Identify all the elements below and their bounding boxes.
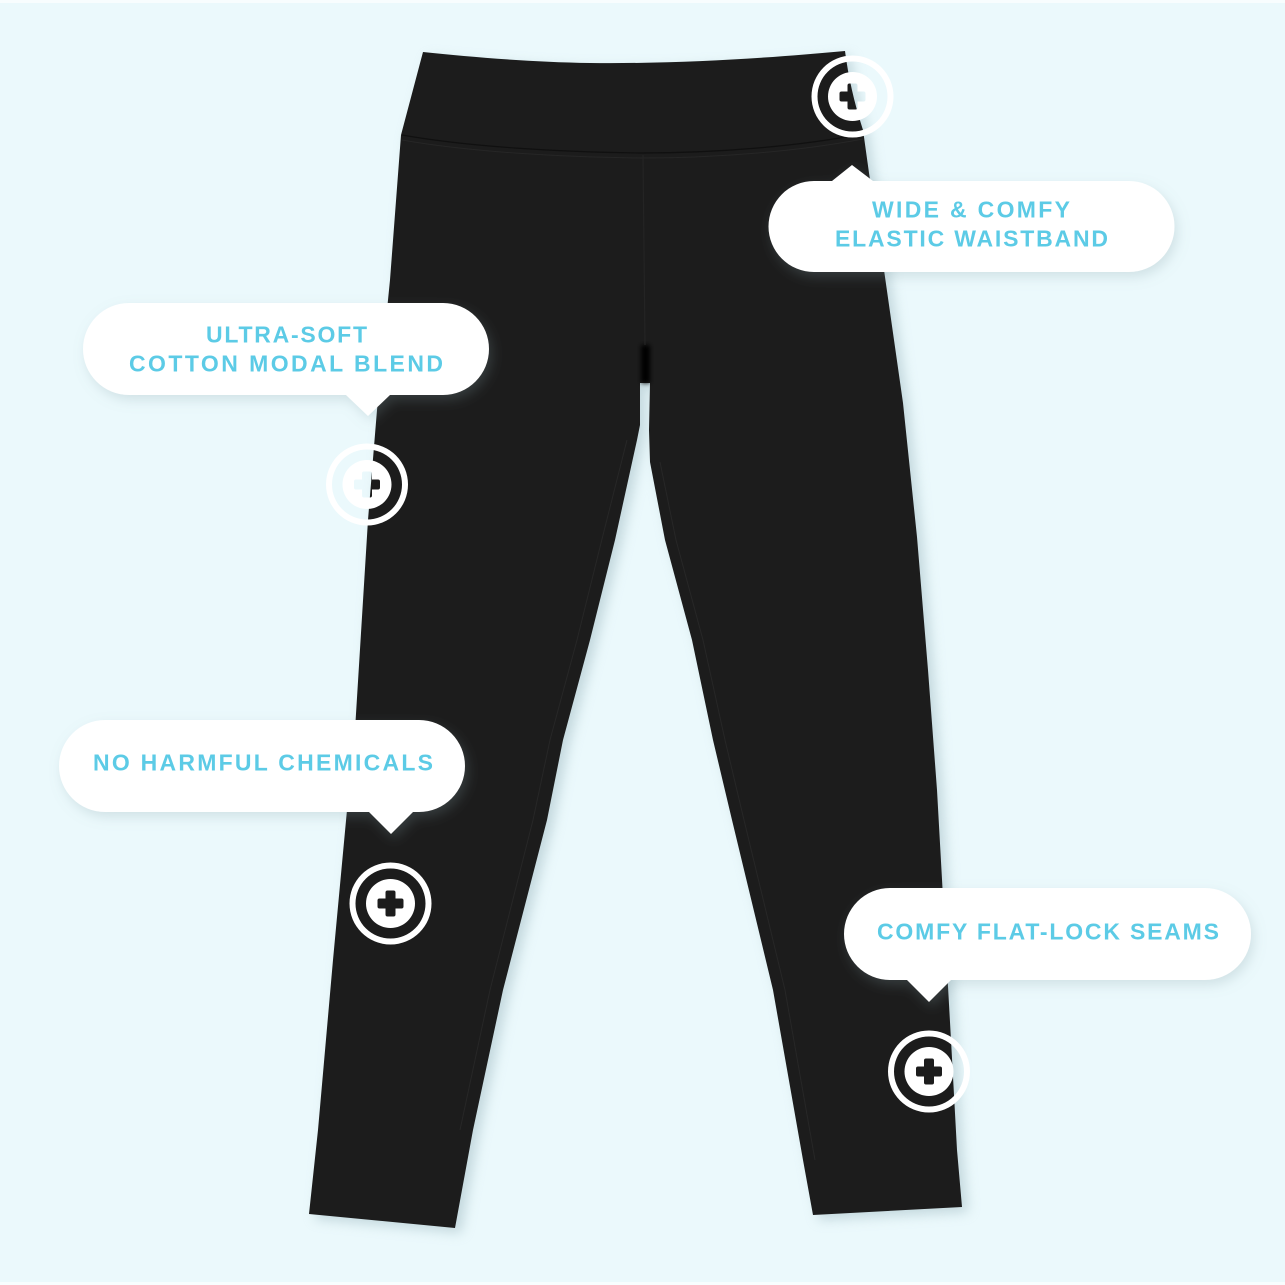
callout: fabric [83,303,489,416]
center seam [643,155,645,345]
waistband seam [402,134,862,153]
bubble shape [768,165,1174,272]
top edge highlight [0,0,1285,3]
bubble shape [83,303,489,416]
leggings shadow [315,56,968,1233]
label text: COMFY FLAT-LOCK SEAMS [877,918,1219,944]
callout: chemicals [59,720,465,834]
right inseam [660,462,815,1160]
bubble shape [59,720,465,834]
callout: waistband [768,165,1174,272]
bubble shape [844,888,1251,1002]
label text: WIDE & COMFY [872,196,1070,222]
waistband stitching [402,139,863,158]
callout: fabric: COTTON MODAL BLEND [129,350,443,376]
left inseam [460,440,627,1130]
icon: plus marker chemicals [350,862,432,945]
label text: NO HARMFUL CHEMICALS [93,750,433,776]
bottom edge highlight [0,1282,1285,1285]
callout: waistband: ELASTIC WAISTBAND [835,226,1108,252]
icon: plus marker seams [888,1030,970,1113]
callout: seams [844,888,1251,1002]
leggings garment [309,51,962,1228]
leggings silhouette [309,51,962,1228]
label text: ULTRA-SOFT [206,322,367,348]
crotch shadow [641,345,650,383]
icon: plus marker waistband [812,55,894,138]
icon: plus marker fabric [326,443,408,526]
